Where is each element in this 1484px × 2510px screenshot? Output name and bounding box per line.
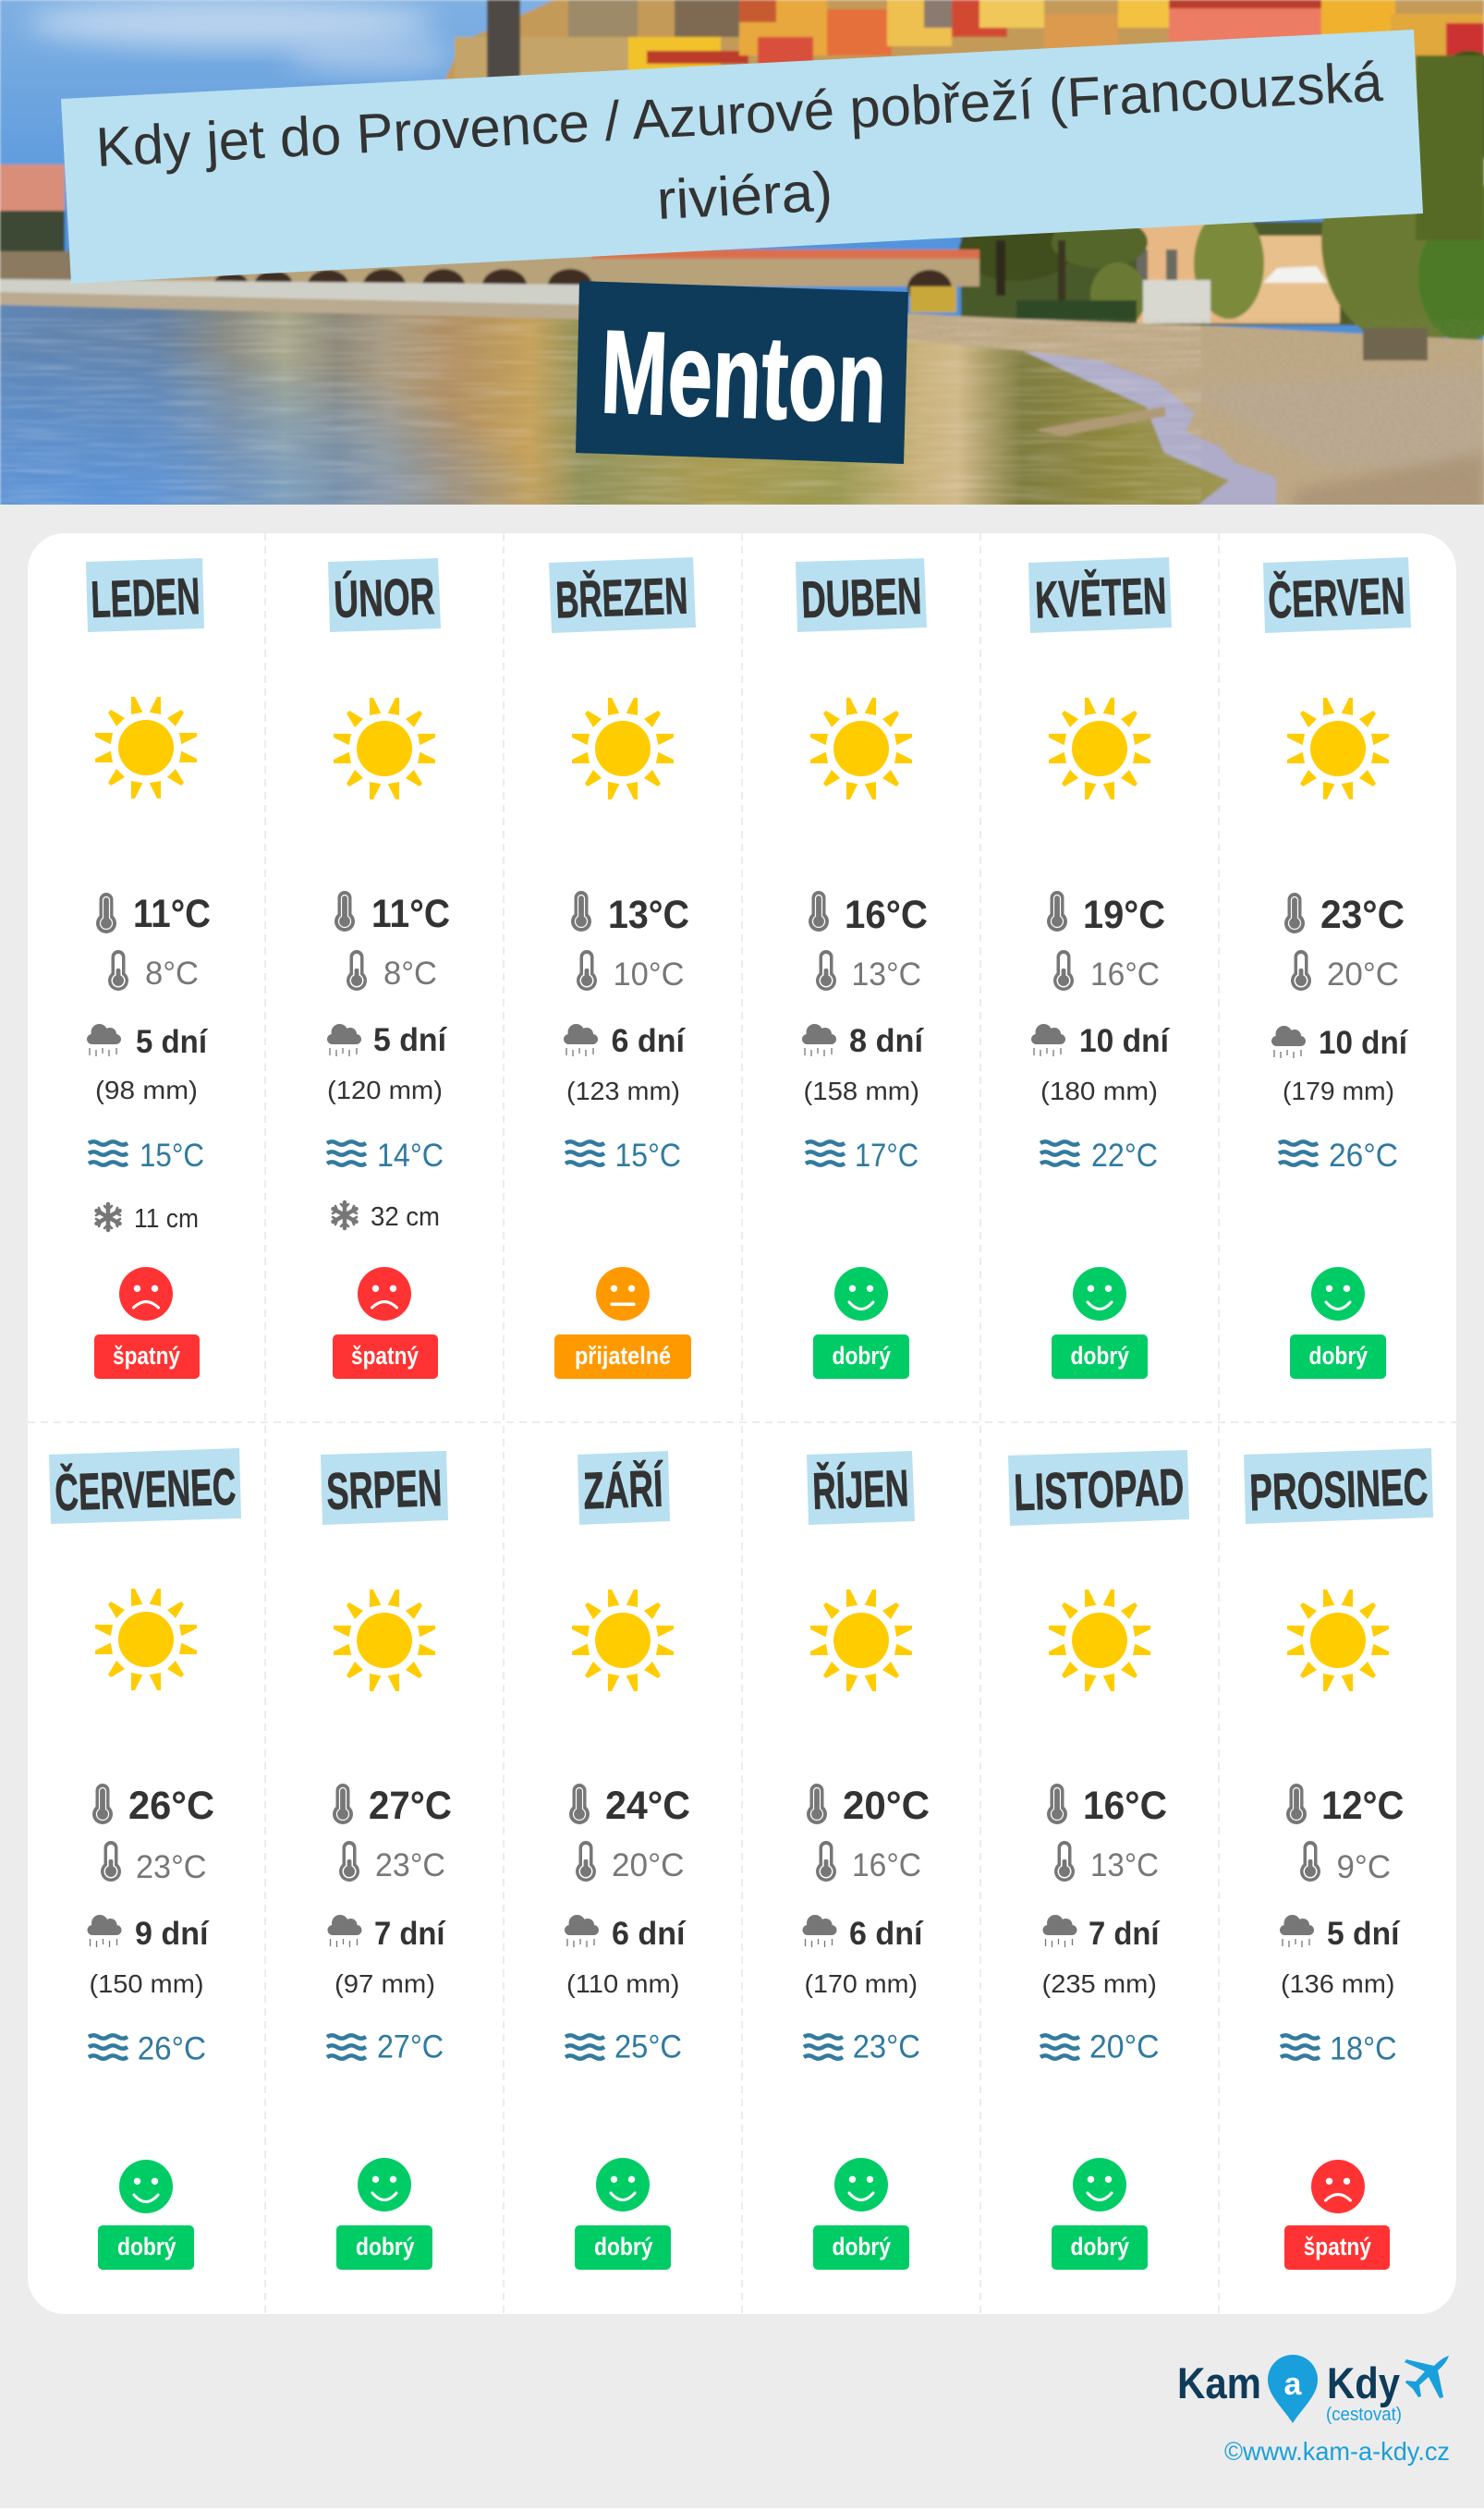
title text line 2: riviéra) (655, 160, 833, 231)
rainfall: (98 mm) (95, 1076, 198, 1104)
icon: rating face (119, 1267, 173, 1321)
rainfall: (170 mm) (804, 1969, 918, 1998)
rainfall: (123 mm) (566, 1077, 680, 1105)
icon: thermometer high (1047, 891, 1067, 932)
title text line 1: Kdy jet do Provence / Azurové pobřeží (Francouzská (94, 51, 1384, 178)
logo: Kam a Kdy: (cestovat) (1326, 2405, 1402, 2425)
logo: Kam a Kdy: Kdy (1327, 2358, 1400, 2407)
icon: thermometer low (1054, 1841, 1075, 1882)
min temperature: 13°C (1090, 1847, 1159, 1883)
rainfall: (150 mm) (89, 1969, 203, 1998)
icon: thermometer low (1291, 950, 1311, 991)
rainfall: (97 mm) (335, 1969, 435, 1998)
left town (0, 164, 65, 211)
icon: rating face (834, 2158, 888, 2211)
icon: rain (327, 1024, 361, 1056)
icon: thermometer high (335, 891, 355, 932)
website link: ©www.kam-a-kdy.cz (1224, 2437, 1450, 2466)
icon: rain (87, 1024, 121, 1056)
max temperature: 27°C (369, 1784, 452, 1828)
icon: sun (95, 697, 197, 798)
icon: thermometer low (576, 1841, 596, 1882)
icon: sun (1049, 698, 1150, 799)
icon: sea (1279, 1141, 1318, 1165)
max temperature: 11°C (133, 892, 211, 936)
icon: thermometer low (816, 1841, 836, 1882)
icon: thermometer low (101, 1841, 121, 1882)
icon: thermometer low (347, 950, 367, 991)
max temperature: 16°C (1083, 1784, 1167, 1828)
icon: sea (1040, 1141, 1079, 1165)
icon: sun (810, 698, 912, 799)
panel: LISTOPAD (1008, 1450, 1189, 2270)
rating badge (1284, 2225, 1390, 2270)
icon: airplane (1405, 2356, 1449, 2398)
icon: rating face (358, 2158, 411, 2211)
max temperature: 12°C (1321, 1784, 1404, 1828)
icon: sun (1049, 1590, 1150, 1691)
rating badge (336, 2225, 432, 2270)
rainfall: (136 mm) (1281, 1969, 1395, 1998)
icon: thermometer low (577, 950, 597, 991)
min temperature: 23°C (375, 1847, 445, 1883)
max temperature: 24°C (605, 1784, 690, 1828)
rating label: dobrý (356, 2233, 414, 2260)
panel: ÚNOR (327, 558, 450, 1379)
icon: rain (802, 1915, 837, 1947)
icon: thermometer low (816, 950, 836, 991)
icon: thermometer high (809, 891, 829, 932)
sea temperature: 26°C (1329, 1138, 1398, 1174)
panel: ŘÍJEN (802, 1451, 930, 2270)
icon: thermometer high (96, 893, 116, 933)
sea temperature: 18°C (1330, 2031, 1397, 2066)
city name: Menton: Menton (599, 306, 889, 448)
panel: LEDEN (86, 558, 211, 1379)
icon: rating face (1311, 2160, 1365, 2213)
icon: sea (806, 1141, 845, 1165)
sea temperature: 25°C (614, 2029, 682, 2065)
rain days: 10 dní (1079, 1023, 1170, 1059)
heading: ČERVENEC (54, 1457, 237, 1521)
max temperature: 19°C (1083, 893, 1165, 937)
min temperature: 9°C (1336, 1849, 1391, 1885)
icon: sun (572, 698, 674, 799)
heading: SRPEN (325, 1458, 443, 1520)
icon: sun (1287, 1590, 1389, 1691)
arcade (116, 257, 981, 288)
sea temperature: 15°C (140, 1138, 204, 1174)
jetty (1035, 407, 1166, 436)
icon: rating face (1073, 1267, 1126, 1321)
title banner (61, 30, 1423, 284)
rain days: 7 dní (374, 1916, 446, 1952)
icon: snow (96, 1204, 120, 1230)
icon: rain (327, 1915, 362, 1947)
min temperature: 8°C (145, 956, 199, 992)
rating badge (575, 2225, 671, 2270)
logo: Kam a Kdy: a (1284, 2367, 1303, 2402)
rating label: dobrý (594, 2233, 652, 2260)
sea temperature: 23°C (853, 2029, 920, 2065)
sea temperature: 14°C (377, 1138, 444, 1174)
icon: thermometer low (1300, 1841, 1320, 1882)
rating badge (1052, 2225, 1148, 2270)
icon: thermometer high (569, 1784, 590, 1824)
wall and upper sand (0, 279, 591, 307)
icon: sun (1287, 698, 1389, 799)
icon: rain (1271, 1026, 1306, 1058)
icon: thermometer high (571, 891, 591, 932)
icon: rating face (1073, 2158, 1126, 2211)
panel: ZÁŘÍ (565, 1451, 690, 2270)
icon: sun (572, 1590, 674, 1691)
rainfall: (180 mm) (1040, 1077, 1158, 1105)
min temperature: 20°C (612, 1847, 684, 1883)
panel: BŘEZEN (549, 557, 696, 1379)
rain days: 5 dní (373, 1022, 447, 1058)
sea temperature: 15°C (615, 1138, 681, 1174)
rain days: 6 dní (612, 1023, 686, 1059)
rating label: špatný (1304, 2233, 1371, 2260)
rainfall: (179 mm) (1283, 1077, 1394, 1105)
heading: ŘÍJEN (811, 1458, 909, 1520)
min temperature: 8°C (383, 956, 437, 992)
max temperature: 11°C (371, 892, 450, 936)
rating label: špatný (113, 1342, 180, 1370)
sea temperature: 22°C (1091, 1138, 1158, 1174)
panel: months card (28, 533, 1456, 2314)
rating badge (1290, 1334, 1386, 1379)
icon: rating face (834, 1267, 888, 1321)
panel: DUBEN (796, 558, 928, 1379)
sea temperature: 20°C (1089, 2029, 1159, 2065)
icon: rating face (119, 2160, 173, 2213)
icon: rain (1042, 1915, 1077, 1947)
panel: KVĚTEN (1028, 557, 1172, 1379)
rating label: dobrý (1070, 1342, 1129, 1370)
icon: rain (87, 1915, 122, 1947)
icon: thermometer high (1284, 893, 1305, 933)
icon: thermometer high (1047, 1784, 1067, 1824)
rating label: dobrý (117, 2233, 176, 2260)
icon: thermometer low (108, 950, 128, 991)
min temperature: 16°C (1090, 956, 1160, 993)
heading: BŘEZEN (554, 567, 688, 628)
max temperature: 13°C (608, 893, 689, 937)
icon: rain (1031, 1024, 1065, 1056)
icon: thermometer high (333, 1784, 353, 1824)
max temperature: 16°C (845, 893, 928, 937)
icon: sun (810, 1590, 912, 1691)
rating label: dobrý (1308, 1342, 1368, 1370)
icon: sun (334, 698, 435, 799)
heading: KVĚTEN (1034, 567, 1167, 628)
icon: thermometer high (92, 1784, 113, 1824)
icon: snow (333, 1202, 357, 1228)
rating badge (98, 2225, 194, 2270)
panel: PROSINEC (1244, 1448, 1433, 2270)
right sand (887, 312, 1484, 518)
rating badge (1052, 1334, 1148, 1379)
icon: sun (334, 1590, 435, 1691)
icon: rain (565, 1915, 599, 1947)
logo: Kam a Kdy (1177, 2355, 1449, 2425)
rainfall: (235 mm) (1042, 1969, 1157, 1998)
water (0, 305, 1276, 518)
icon: rain (802, 1024, 836, 1056)
rating badge (813, 2225, 909, 2270)
icon: thermometer low (1053, 950, 1074, 991)
heading: DUBEN (800, 567, 922, 628)
panel: ČERVENEC (49, 1448, 241, 2270)
rain days: 10 dní (1319, 1025, 1408, 1061)
icon: sea (327, 1141, 366, 1165)
snowfall: 11 cm (134, 1204, 199, 1234)
heading: LEDEN (90, 567, 201, 628)
header photo: Menton seafront (0, 0, 1484, 518)
icon: map pin (1268, 2355, 1318, 2423)
rain days: 9 dní (135, 1916, 210, 1952)
icon: rating face (596, 2158, 650, 2211)
heading: ÚNOR (333, 567, 435, 628)
heading: ZÁŘÍ (582, 1458, 664, 1519)
rating label: dobrý (1070, 2233, 1129, 2260)
right buildings and trees (959, 220, 1357, 327)
rainfall: (120 mm) (327, 1076, 443, 1104)
min temperature: 20°C (1327, 956, 1399, 993)
icon: thermometer high (1286, 1784, 1307, 1824)
icon: sea (1281, 2035, 1320, 2059)
icon: sea (327, 2035, 366, 2059)
max temperature: 20°C (843, 1784, 930, 1828)
rating badge (94, 1334, 200, 1379)
icon: sea (566, 2035, 604, 2059)
rating label: dobrý (832, 2233, 891, 2260)
min temperature: 13°C (852, 956, 921, 993)
rain days: 6 dní (612, 1916, 687, 1952)
rating badge (813, 1334, 909, 1379)
min temperature: 23°C (136, 1849, 207, 1885)
icon: rating face (358, 1267, 411, 1321)
icon: rain (1280, 1915, 1314, 1947)
min temperature: 10°C (614, 956, 684, 993)
icon: rating face (596, 1267, 650, 1321)
icon: rating face (1311, 1267, 1365, 1321)
max temperature: 26°C (128, 1784, 214, 1828)
rating badge (554, 1334, 691, 1379)
snowfall: 32 cm (371, 1202, 440, 1232)
panel: SRPEN (321, 1451, 452, 2270)
icon: sea (566, 1141, 604, 1165)
icon: sea (804, 2035, 843, 2059)
icon: thermometer high (807, 1784, 827, 1824)
icon: thermometer low (339, 1841, 359, 1882)
sea temperature: 26°C (138, 2031, 206, 2066)
icon: sea (89, 2035, 128, 2059)
rainfall: (110 mm) (566, 1969, 680, 1998)
heading: LISTOPAD (1013, 1457, 1185, 1521)
icon: rain (564, 1024, 598, 1056)
logo: Kam a Kdy: Kam (1177, 2358, 1261, 2407)
rating label: dobrý (832, 1342, 891, 1370)
rating label: přijatelné (575, 1342, 671, 1370)
rain days: 6 dní (849, 1916, 924, 1952)
sea temperature: 17°C (855, 1138, 918, 1174)
max temperature: 23°C (1320, 893, 1405, 937)
rating label: špatný (351, 1342, 419, 1370)
rain days: 5 dní (136, 1024, 208, 1060)
sea temperature: 27°C (377, 2029, 444, 2065)
rain days: 5 dní (1327, 1916, 1401, 1952)
rain days: 8 dní (849, 1023, 924, 1059)
panel: ČERVEN (1263, 557, 1411, 1379)
rainfall: (158 mm) (804, 1077, 919, 1105)
icon: sea (89, 1141, 128, 1165)
rating badge (333, 1334, 438, 1379)
icon: sun (95, 1589, 197, 1690)
city name: Menton (576, 281, 908, 464)
heading: ČERVEN (1267, 566, 1405, 629)
rain days: 7 dní (1089, 1916, 1161, 1952)
min temperature: 16°C (852, 1847, 921, 1883)
icon: sea (1040, 2035, 1079, 2059)
